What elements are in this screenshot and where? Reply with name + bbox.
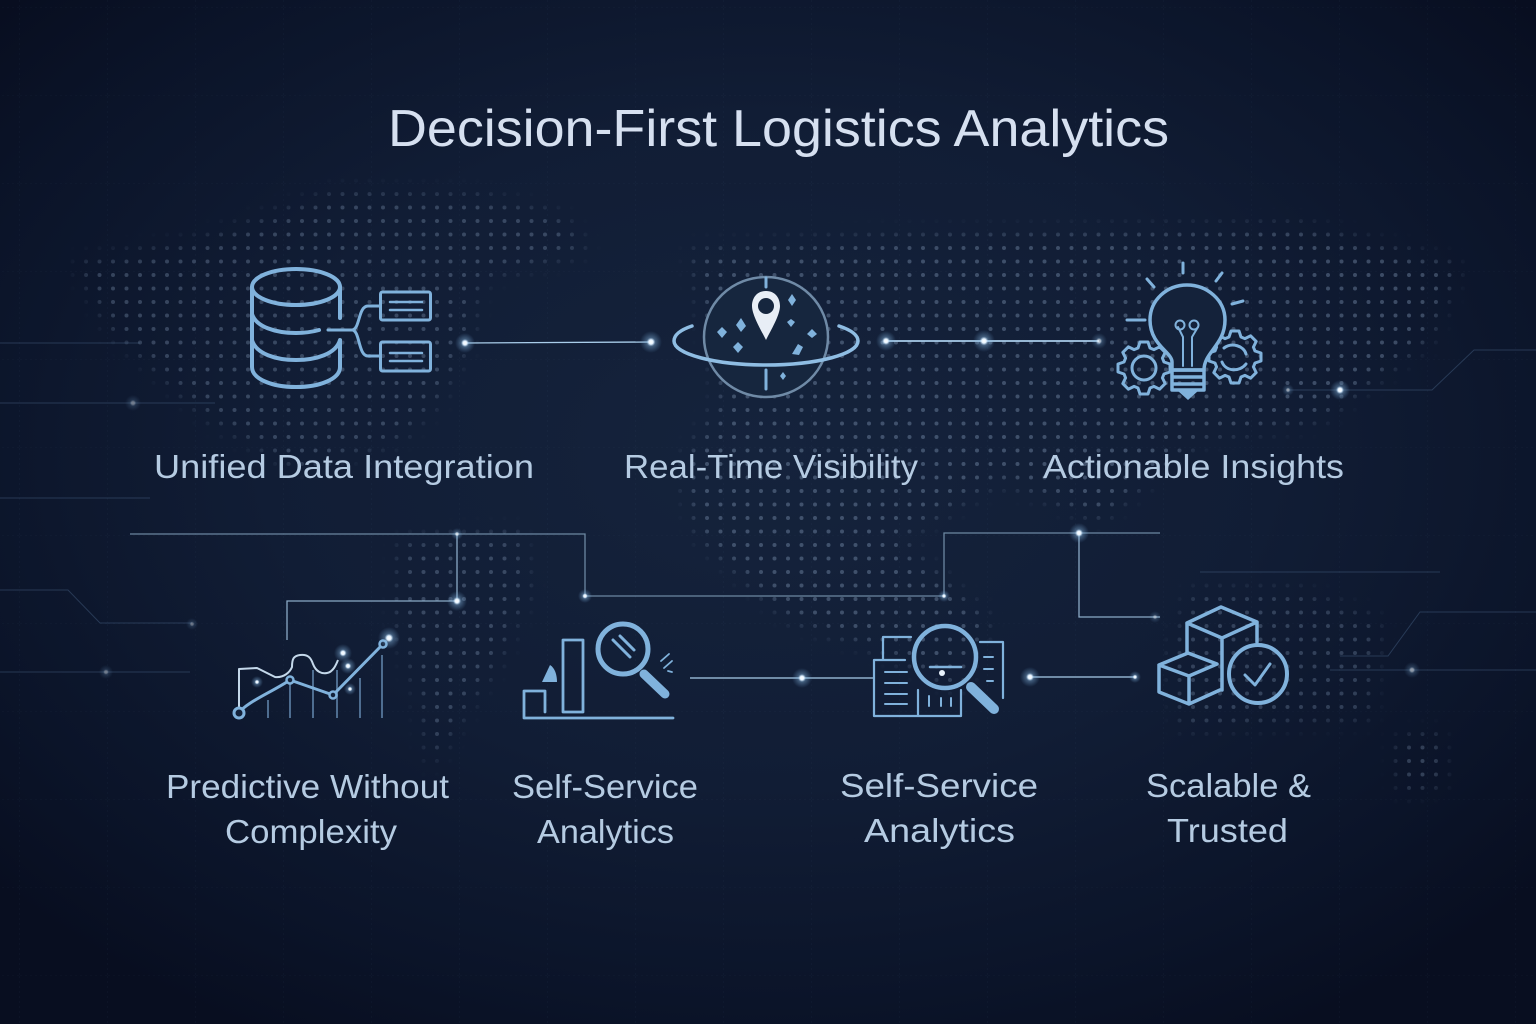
icon: predictive trend chart [234,627,400,718]
label: Scalable & Trusted: Scalable & [1146,767,1311,804]
icon: bars with magnifier [524,624,673,718]
label: Self-Service Analytics (right): Self-Service [840,767,1038,804]
connector: upper circuit route [130,523,1161,640]
label: Predictive Without Complexity: Complexity [225,813,398,850]
label: Scalable & Trusted: Trusted [1167,812,1288,849]
label: Unified Data Integration: Unified Data Integration [154,448,534,485]
label: Real-Time Visibility: Real-Time Visibility [624,448,919,485]
label: Self-Service Analytics (right): Analytics [864,812,1015,849]
label: Scalable & Trusted [1146,767,1311,849]
label: Actionable Insights: Actionable Insights [1043,448,1344,485]
icon: documents with magnifier [874,626,1003,716]
label: Self-Service Analytics (left): Analytics [537,813,674,850]
title: Decision-First Logistics Analytics [388,100,1169,158]
connector: visibility to insights [876,330,1107,352]
faint background circuit lines [0,343,1536,679]
icon: light bulb with gears [1118,263,1261,400]
label: Self-Service Analytics (right) [840,767,1038,849]
connector: data integration to visibility [455,331,662,353]
icon: database with linked records [252,269,430,387]
connector: analytics to scalable [1020,667,1141,687]
dotted world map [74,192,1464,790]
icon: globe with location pin [674,277,858,397]
label: Self-Service Analytics (left): Self-Service [512,768,698,805]
label: Self-Service Analytics (left) [512,768,698,850]
label: Predictive Without Complexity [166,768,449,850]
connector: analytics to analytics [690,668,875,688]
icon: boxes with check badge [1159,607,1287,704]
label: Predictive Without Complexity: Predictive Without [166,768,449,805]
